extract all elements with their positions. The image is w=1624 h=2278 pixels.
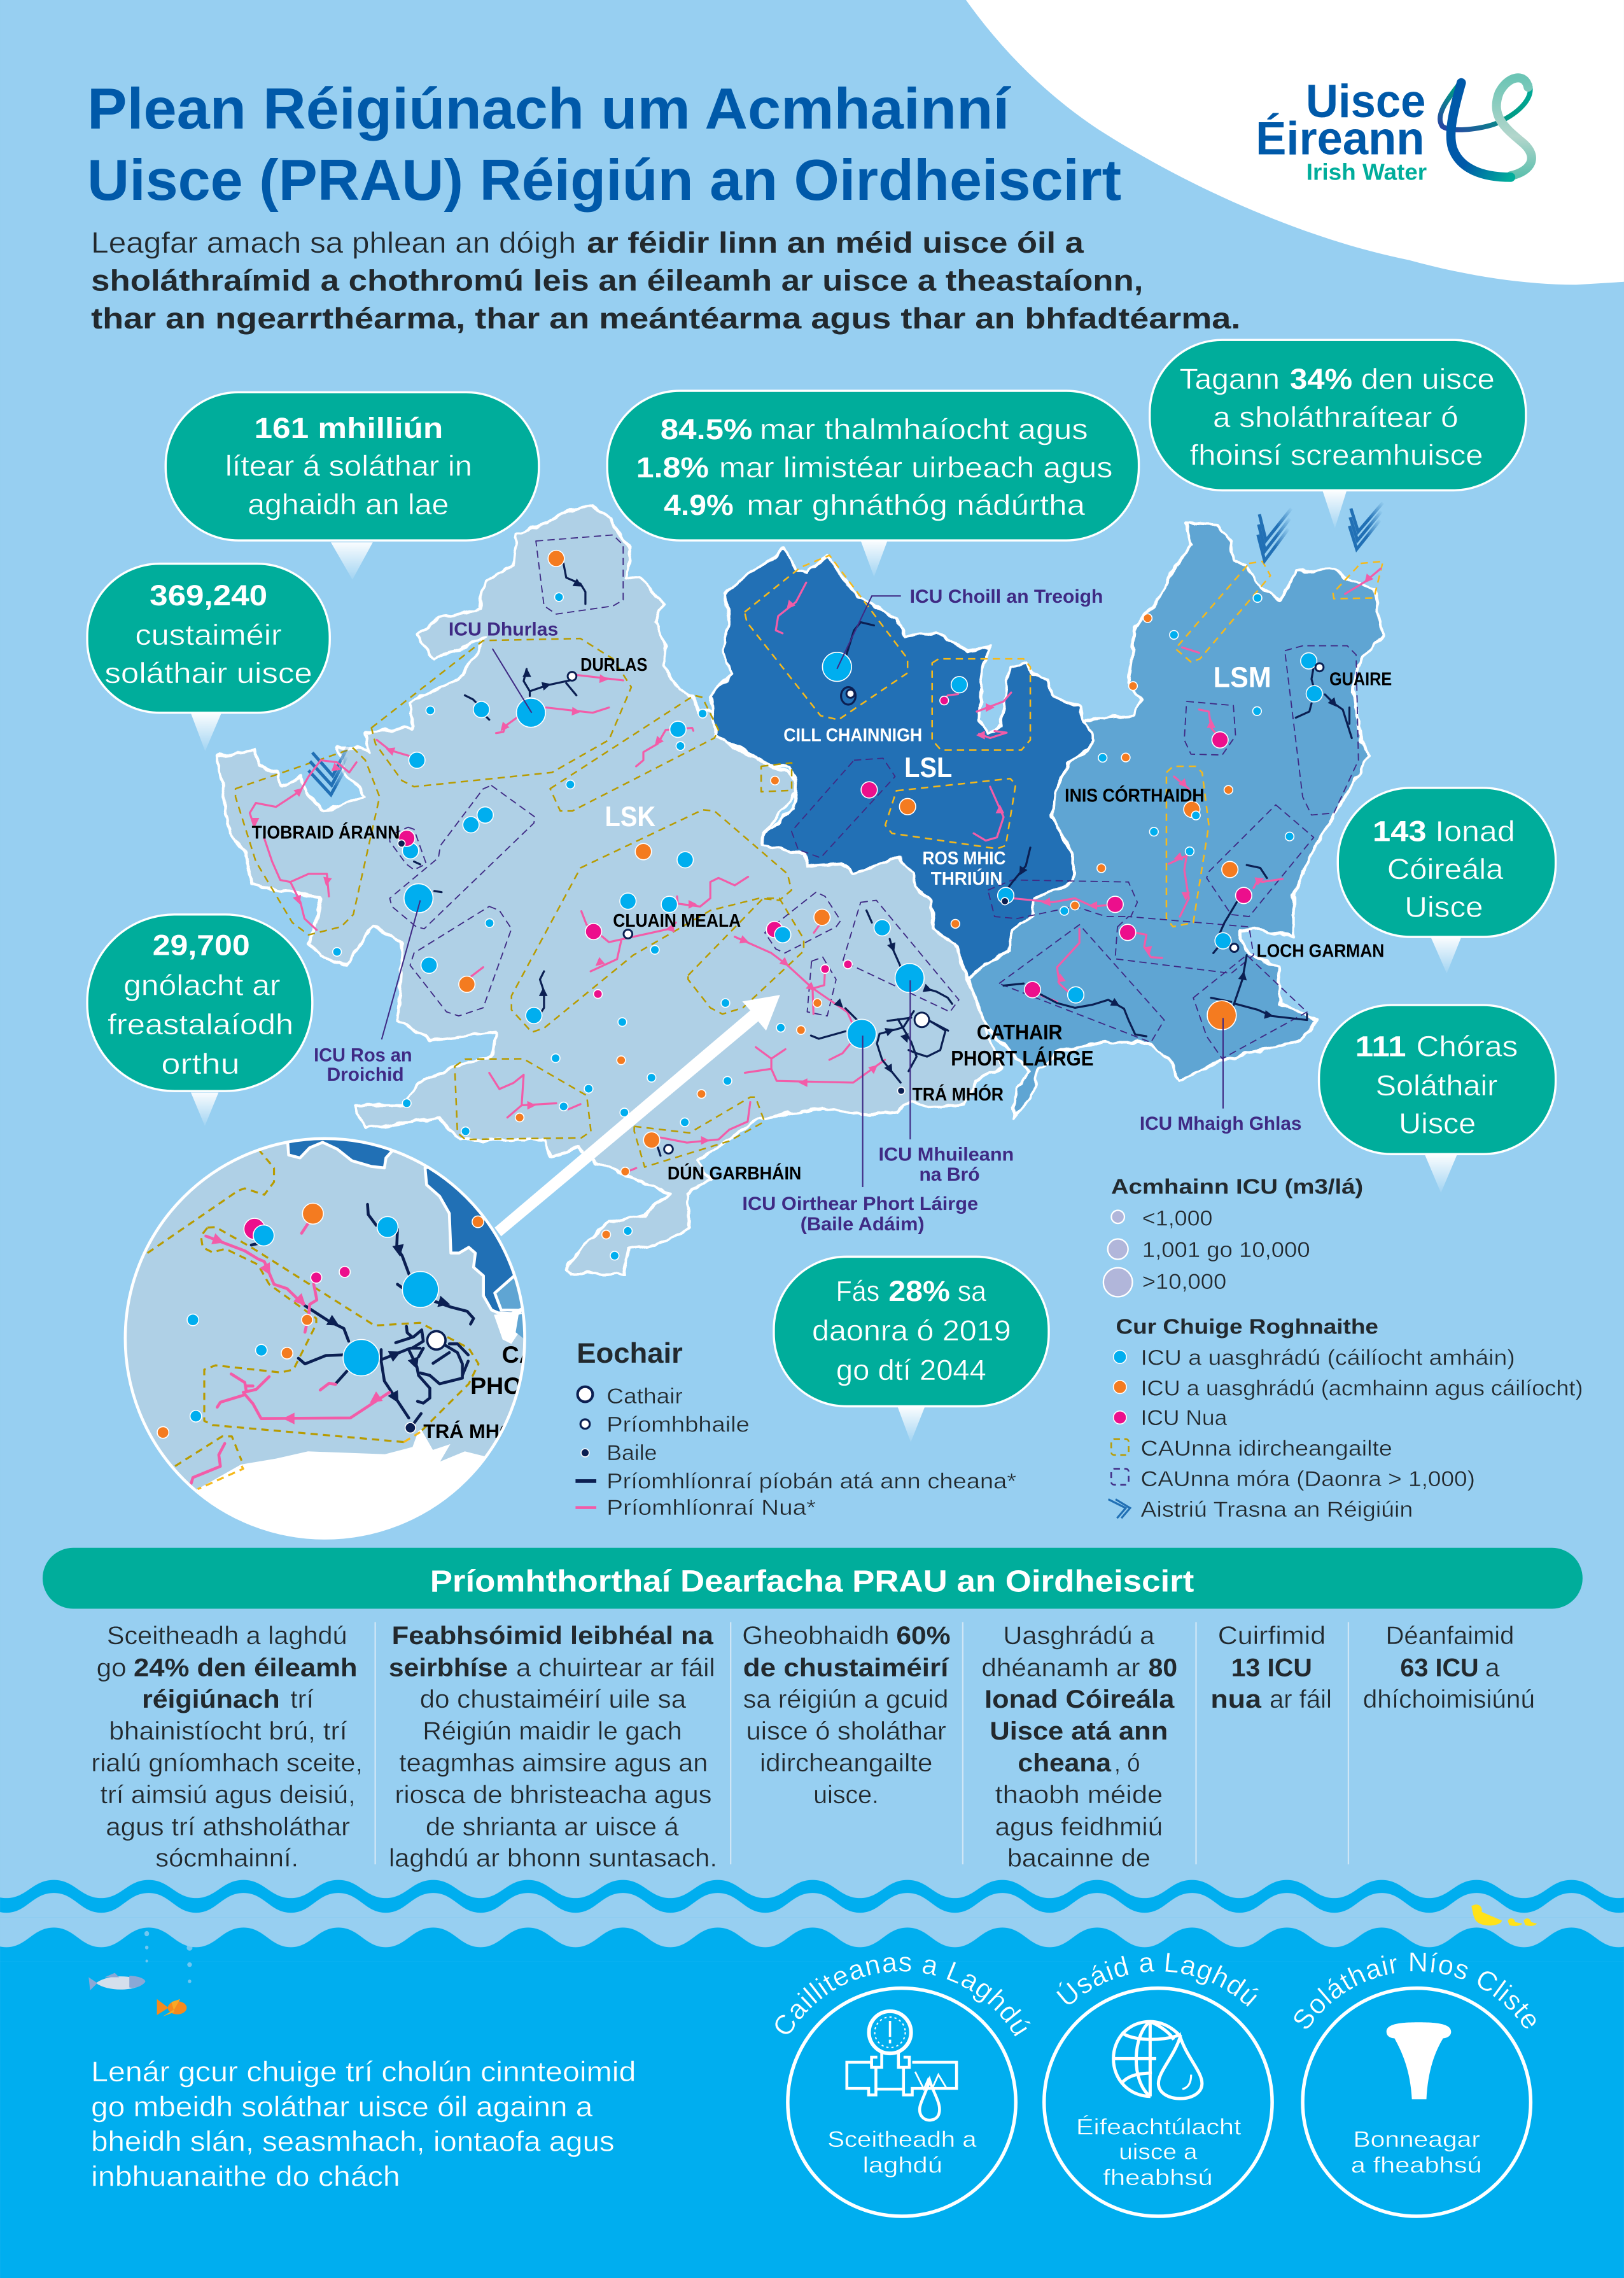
callout: 111 supply systems: Uisce (1399, 1107, 1476, 1139)
column: leakage outcome: go (97, 1654, 127, 1682)
callout: 111 supply systems: Soláthair (1376, 1069, 1497, 1102)
map: place labels: na Bró (919, 1165, 980, 1185)
column: 60% customers outcome: 60% (896, 1622, 951, 1650)
map: ICU leader lines (382, 596, 1223, 1187)
map: place labels: (Baile Adáim) (801, 1214, 925, 1235)
closing statement: inbhuanaithe do chách (91, 2162, 400, 2193)
column: 80 treatment plant upgrades (981, 1622, 1177, 1873)
logo: Uisce Éireann Irish Water: Irish Water (1306, 159, 1427, 185)
column: service levels outcome: laghdú ar bhonn suntasach. (389, 1845, 717, 1873)
column: 13 new ICUs: Cuirfimid (1218, 1622, 1326, 1650)
wave band (0, 1874, 1624, 1918)
map: place labels: GUAIRE (1329, 669, 1392, 689)
map: place labels: ROS MHIC (922, 848, 1005, 869)
pillar: reduce losses: Cailliteanas a Laghdú (775, 1957, 1031, 2037)
pillar: reduce use (1042, 1953, 1274, 2218)
column: service levels outcome: do chustaiméirí uile sa (420, 1685, 687, 1713)
callout: land use percentages: mar limistéar uirbeach agus (719, 451, 1112, 484)
inset: Waterford detail: PHORT LÁIRGE (470, 1372, 650, 1399)
pillar: smarter supply: a fheabhsú (1351, 2153, 1482, 2177)
column: 60% customers outcome: uisce ó sholáthar (746, 1717, 946, 1745)
callout: 111 supply systems: Chóras (1417, 1030, 1518, 1062)
callout: 143 treatment plants: Uisce (1404, 890, 1483, 923)
legend: selected approach: ICU a uasghrádú (cáilíocht amháin) (1141, 1346, 1515, 1370)
callout: 28% population growth: go dtí 2044 (836, 1354, 986, 1386)
closing statement: go mbeidh soláthar uisce óil againn a (91, 2092, 593, 2123)
inset: Waterford detail: TRÁ MHÓR (423, 1419, 529, 1442)
column: service levels outcome: a chuirtear ar fáil (516, 1654, 715, 1682)
map: place labels: CILL CHAINNIGH (783, 726, 922, 746)
legend: ICU capacity: >10,000 (1142, 1270, 1226, 1294)
column: leakage outcome (91, 1622, 363, 1873)
column: leakage outcome: bhainistíocht brú, trí (109, 1717, 347, 1745)
legend: selected approach: CAUnna idircheangailte (1141, 1437, 1392, 1461)
column: 80 treatment plant upgrades: Uasghrádú a (1003, 1622, 1155, 1650)
map: interconnected zones (yellow dashed) (745, 555, 1383, 927)
legend: selected approach: Cur Chuige Roghnaithe (1116, 1316, 1378, 1339)
column: 63 ICUs decommissioned: a (1485, 1654, 1500, 1682)
callout: 143 treatment plants: Ionad (1435, 815, 1515, 848)
map: place labels: LOCH GARMAN (1257, 941, 1384, 962)
map: place labels: ICU Oirthear Phort Láirge (742, 1194, 978, 1214)
map: place labels: DÚN GARBHÁIN (668, 1162, 801, 1184)
icon: pressure gauge and leaking pipe (847, 2011, 956, 2120)
icon: grey fish (88, 1973, 145, 1990)
map: pipeline flow arrows (pink) (251, 573, 1373, 1145)
header bar: key positive outcomes: Príomhthorthaí Dearfacha PRAU an Oirdheiscirt (430, 1564, 1194, 1598)
intro text: sholáthraímid a chothromú leis an éileamh ar uisce a theastaíonn, (91, 264, 1143, 297)
map: ICU upgrades, quality only (blue points) (333, 593, 1322, 1260)
map: place labels: CLUAIN MEALA (613, 911, 741, 931)
callout: 369,240 customers: custaiméir (135, 619, 282, 651)
callout: 161 mhilliún: lítear á soláthar in (225, 450, 472, 482)
column: service levels outcome: Réigiún maidir le gach (423, 1717, 682, 1745)
title: Plean Réigiúnach um Acmhainní (87, 76, 1011, 141)
column: 80 treatment plant upgrades: agus feidhmiú (995, 1813, 1163, 1841)
legend: Eochair (key) (575, 1338, 1016, 1520)
map: place labels: PHORT LÁIRGE (951, 1046, 1094, 1071)
column: 60% customers outcome: sa réigiún a gcuid (743, 1685, 948, 1713)
column: 63 ICUs decommissioned: 63 ICU (1400, 1654, 1479, 1682)
map: place labels: LSK (605, 801, 655, 833)
column: 80 treatment plant upgrades: Ionad Cóireála (984, 1685, 1175, 1713)
column: 63 ICUs decommissioned: dhíchoimisiúnú (1363, 1685, 1535, 1713)
callout: 28% population growth: sa (958, 1275, 986, 1307)
column: leakage outcome: réigiúnach (142, 1685, 280, 1713)
column: 60% customers outcome: Gheobhaidh (742, 1622, 889, 1650)
pillar: reduce losses (775, 1957, 1031, 2218)
map: place labels: INIS CÓRTHAIDH (1065, 784, 1205, 806)
map: place labels (252, 587, 1392, 1235)
callout: 143 treatment plants: Cóireála (1387, 853, 1504, 885)
map: place labels: THRIÚIN (931, 868, 1002, 889)
column: 80 treatment plant upgrades: bacainne de (1007, 1845, 1151, 1873)
pillar: smarter supply: Soláthair Níos Cliste (1294, 1952, 1536, 2029)
column: 80 treatment plant upgrades: dhéanamh ar (981, 1654, 1140, 1682)
callout: 111 supply systems: 111 (1355, 1030, 1406, 1062)
legend: ICU capacity: Acmhainn ICU (m3/lá) (1111, 1176, 1363, 1199)
legend: Eochair (key): Príomhbhaile (606, 1413, 750, 1437)
logo: Uisce Éireann Irish Water: Éireann (1256, 113, 1425, 164)
column: 13 new ICUs: 13 ICU (1231, 1654, 1312, 1682)
map: three regions (218, 507, 1383, 1274)
column: leakage outcome: agus trí athsholáthar (106, 1813, 350, 1841)
legend: selected approach: Aistriú Trasna an Réigiúin (1141, 1498, 1413, 1522)
map: overlapping point (766, 922, 783, 938)
map: place labels: LSM (1214, 661, 1271, 694)
legend: Eochair (key): Baile (606, 1441, 657, 1465)
zoom arrow to inset (494, 995, 780, 1236)
map: place labels: Droichid (327, 1065, 404, 1085)
callout: 28% population growth: Fás (836, 1275, 879, 1307)
map: place labels: ICU Dhurlas (449, 620, 558, 640)
column: 60% customers outcome (742, 1622, 951, 1809)
column: 80 treatment plant upgrades: cheana (1018, 1749, 1112, 1777)
title (87, 76, 1121, 213)
map: new pipelines (pink) (249, 568, 1381, 1171)
column: service levels outcome: de shrianta ar uisce á (426, 1813, 679, 1841)
callout: 34% surface water: a sholáthraítear ó (1213, 401, 1459, 433)
callout: 28% population growth (774, 1256, 1049, 1442)
sea with wave top (0, 1918, 1624, 2278)
callout: 29,700 businesses (87, 915, 312, 1126)
map: place labels: TRÁ MHÓR (912, 1083, 1004, 1105)
closing statement (91, 2057, 636, 2193)
map: new ICUs (pink points) (398, 696, 1252, 999)
intro text: Leagfar amach sa phlean an dóigh (91, 226, 576, 259)
column: leakage outcome: trí (290, 1685, 314, 1713)
callout: land use percentages: mar ghnáthóg nádúrtha (746, 489, 1086, 521)
callout: 143 treatment plants: 143 (1373, 815, 1427, 848)
column: 63 ICUs decommissioned: Déanfaimid (1386, 1622, 1514, 1650)
column: leakage outcome: trí aimsiú agus deisiú, (101, 1781, 356, 1809)
intro text (91, 226, 1240, 335)
title: Uisce (PRAU) Réigiún an Oirdheiscirt (87, 148, 1121, 213)
legend: selected approach: ICU Nua (1141, 1406, 1228, 1430)
legend: selected approach: ICU a uasghrádú (acmhainn agus cáilíocht) (1141, 1377, 1583, 1401)
map: LSM region (968, 523, 1383, 1117)
callout: 161 mhilliún: aghaidh an lae (248, 488, 449, 521)
bubbles (144, 1931, 193, 1983)
map: place labels: ICU Mhaigh Ghlas (1140, 1114, 1301, 1134)
callout: 34% surface water: den uisce (1361, 363, 1495, 395)
map: city and town markers (398, 663, 1324, 1153)
column: 60% customers outcome: de chustaiméirí (743, 1654, 949, 1682)
legend: Eochair (key): Príomhlíonraí píobán atá ann cheana* (606, 1470, 1016, 1494)
map: small blue overlays (402, 811, 1200, 859)
column: 80 treatment plant upgrades: , ó (1114, 1749, 1140, 1777)
pillar: reduce use: uisce a (1119, 2140, 1198, 2165)
map: place labels: ICU Choill an Treoigh (910, 587, 1103, 607)
pillar: reduce losses: Sceitheadh a (827, 2127, 977, 2152)
icon: funnel (1387, 2022, 1451, 2099)
map: pipeline flow arrows (navy) (522, 579, 1340, 1076)
map: LSK region (218, 507, 1002, 1274)
column: service levels outcome: Feabhsóimid leibhéal na (392, 1622, 714, 1650)
column: leakage outcome: 24% den éileamh (134, 1654, 358, 1682)
map: place labels: DURLAS (580, 655, 647, 675)
map: place labels: ICU Ros an (314, 1046, 412, 1066)
map: place labels: LSL (904, 752, 952, 784)
callout: 28% population growth: daonra ó 2019 (812, 1314, 1011, 1347)
column: service levels outcome: teagmhas aimsire agus an (399, 1749, 708, 1777)
header bar: key positive outcomes (43, 1548, 1583, 1608)
legend: Eochair (key): Príomhlíonraí Nua* (606, 1496, 816, 1520)
callout: 29,700 businesses: gnólacht ar (123, 969, 281, 1002)
map: place labels: ICU Mhuileann (879, 1144, 1014, 1165)
inset: Waterford detail (123, 1137, 526, 1540)
callout: 369,240 customers: 369,240 (150, 579, 267, 612)
callout: land use percentages: 84.5% (661, 413, 752, 446)
map: overlapping blue point (774, 927, 791, 943)
column: 60% customers outcome: uisce. (813, 1781, 879, 1809)
callout: 369,240 customers: soláthair uisce (104, 657, 312, 689)
map: LSL region (711, 549, 1093, 980)
callout: 28% population growth: 28% (888, 1275, 950, 1307)
callout: 161 mhilliún: 161 mhilliún (255, 412, 443, 444)
callout: 34% surface water: fhoinsí screamhuisce (1189, 439, 1483, 471)
icon: ducks (1471, 1904, 1537, 1926)
callout: 29,700 businesses: 29,700 (153, 929, 250, 962)
column: 80 treatment plant upgrades: thaobh méide (995, 1781, 1163, 1809)
column: leakage outcome: Sceitheadh a laghdú (107, 1622, 347, 1650)
icon: cross-regional transfer arrows (309, 503, 1383, 795)
legend: Eochair (key): Eochair (577, 1338, 683, 1369)
callout: 111 supply systems (1319, 1005, 1556, 1193)
callout: 34% surface water: 34% (1290, 363, 1352, 395)
column: service levels outcome (389, 1622, 717, 1873)
callout: 29,700 businesses: freastalaíodh (108, 1008, 293, 1041)
pillar: reduce use: Úsáid a Laghdú (1056, 1953, 1259, 2007)
column: 13 new ICUs (1210, 1622, 1332, 1713)
intro text: thar an ngearrthéarma, thar an meántéarma agus thar an bhfadtéarma. (91, 302, 1240, 335)
callout: 29,700 businesses: orthu (161, 1048, 240, 1080)
pillar: smarter supply (1294, 1952, 1536, 2218)
callout: land use percentages (607, 391, 1139, 577)
pillar: smarter supply: Bonneagar (1353, 2127, 1480, 2152)
map: large zones (purple dashed) (389, 535, 1359, 1058)
callout: land use percentages: 1.8% (636, 451, 709, 484)
callout: 143 treatment plants (1338, 788, 1556, 973)
pillar: reduce use: fheabhsú (1103, 2165, 1213, 2190)
map: interconnected zones (olive dashed) (235, 638, 804, 1167)
callout: 369,240 customers (87, 564, 330, 751)
column: leakage outcome: sócmhainní. (155, 1845, 298, 1873)
map: ICU upgrades, capacity and quality (orange points) (459, 551, 1238, 1239)
callout: land use percentages: mar thalmhaíocht agus (760, 413, 1088, 446)
column: service levels outcome: riosca de bhristeacha agus (395, 1781, 712, 1809)
icon: orange fish (157, 1999, 186, 2016)
closing statement: Lenár gcur chuige trí cholún cinnteoimid (91, 2057, 636, 2088)
column: 80 treatment plant upgrades: 80 (1149, 1654, 1177, 1682)
map: place labels: CATHAIR (977, 1020, 1063, 1044)
inset: Waterford detail: CATHAIR (502, 1341, 607, 1368)
column: service levels outcome: seirbhíse (389, 1654, 508, 1682)
column: 13 new ICUs: nua (1210, 1685, 1262, 1713)
column: 60% customers outcome: idircheangailte (760, 1749, 932, 1777)
map: existing pipelines (navy) (414, 563, 1352, 1156)
intro text: ar féidir linn an méid uisce óil a (587, 226, 1084, 259)
closing statement: bheidh slán, seasmhach, iontaofa agus (91, 2127, 615, 2158)
legend: selected approach: CAUnna móra (Daonra > 1,000) (1141, 1467, 1475, 1491)
logo: Uisce Éireann Irish Water (1256, 76, 1532, 185)
map: place labels: TIOBRAID ÁRANN (252, 821, 400, 843)
pillar: reduce losses: laghdú (863, 2153, 942, 2177)
pillar: reduce use: Éifeachtúlacht (1076, 2114, 1242, 2139)
logo: Uisce Éireann Irish Water: Uisce (1306, 76, 1425, 127)
column: leakage outcome: rialú gníomhach sceite, (91, 1749, 363, 1777)
callout: land use percentages: 4.9% (664, 489, 734, 521)
callout: 34% surface water: Tagann (1179, 363, 1280, 395)
callout: 34% surface water (1150, 340, 1526, 528)
column: 63 ICUs decommissioned (1363, 1622, 1535, 1713)
callout: 161 mhilliún (165, 392, 539, 580)
legend: selected approach (1109, 1316, 1583, 1522)
icon: globe and water drop (1114, 2021, 1202, 2099)
legend: Eochair (key): Cathair (606, 1384, 683, 1409)
column: 13 new ICUs: ar fáil (1270, 1685, 1332, 1713)
legend: ICU capacity: 1,001 go 10,000 (1142, 1238, 1310, 1262)
white corner panel (966, 0, 1624, 285)
legend: ICU capacity: <1,000 (1142, 1206, 1213, 1230)
legend: ICU capacity (1103, 1176, 1363, 1297)
column: 80 treatment plant upgrades: Uisce atá ann (990, 1717, 1168, 1745)
